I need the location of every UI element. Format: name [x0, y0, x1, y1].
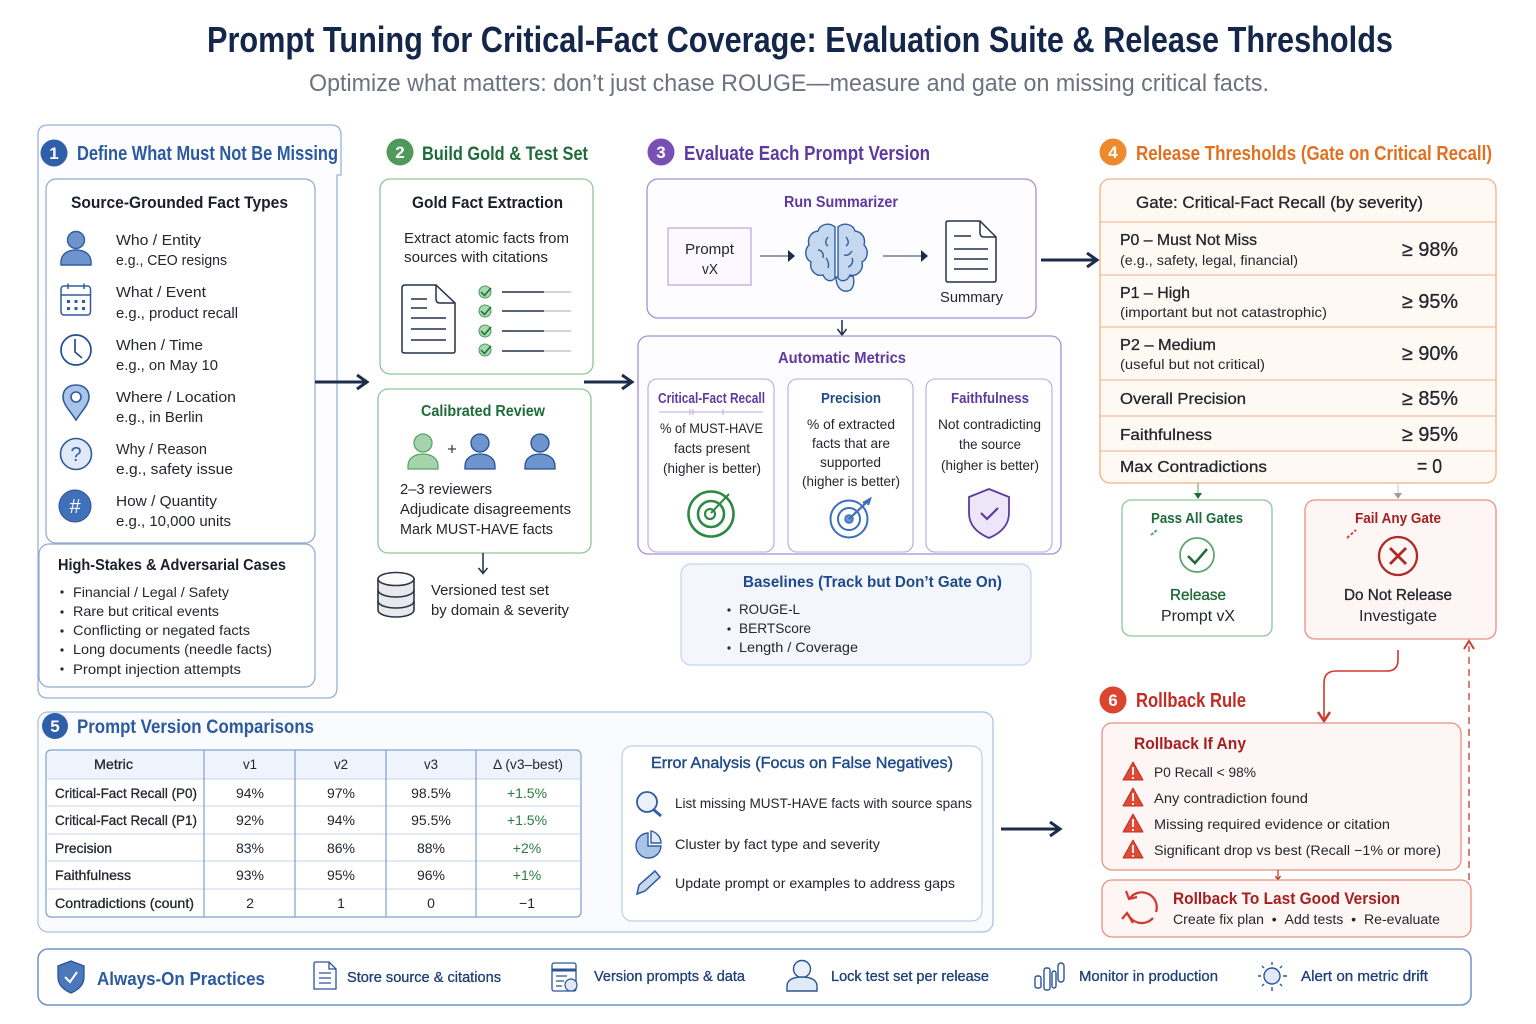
row: contradictions: 0 [427, 895, 435, 911]
heading: rollback rule: Rollback Rule [1136, 690, 1246, 712]
row: recall P0: 98.5% [411, 785, 451, 801]
card: calibrated review [378, 389, 591, 553]
panel: always-on practices bar [38, 949, 1471, 1005]
row: recall P0: 94% [236, 785, 264, 801]
card: rollback if any: Rollback If Any [1134, 735, 1247, 753]
panel 6: rollback rule [1100, 686, 1471, 937]
condition: contradiction: Any contradiction found [1154, 790, 1308, 806]
fact type: why: ? [70, 444, 82, 466]
item: cluster facts: Cluster by fact type and severity [675, 836, 880, 852]
card: fail any gate [1305, 500, 1496, 639]
condition: significant drop: Significant drop vs best (Recall −1% or more) [1154, 842, 1441, 858]
row: faithfulness: 95% [327, 867, 355, 883]
table header row: v3 [424, 756, 438, 772]
panel 5: prompt version comparisons [38, 712, 993, 932]
fact type: what [61, 284, 238, 322]
row: recall P1: 94% [327, 812, 355, 828]
metric card: precision: Precision [821, 391, 881, 407]
practice: store source: Store source & citations [347, 970, 501, 986]
gate row P2: ≥ 90% [1402, 343, 1458, 365]
bar heading: Always-On Practices [97, 968, 265, 989]
card: fail any gate: Fail Any Gate [1355, 511, 1441, 527]
table header row [94, 756, 563, 772]
row: contradictions [55, 895, 535, 911]
gate row faithfulness: ≥ 95% [1402, 424, 1458, 446]
arrow: fail to rollback [1318, 650, 1398, 721]
gate row P1: P1 – High [1120, 285, 1190, 302]
card: automatic metrics [638, 336, 1061, 554]
step badge 2 [386, 138, 414, 166]
item: cluster facts [636, 831, 880, 858]
item: update prompt: Update prompt or examples to address gaps [675, 875, 955, 891]
panel 1: define what must not be missing [38, 125, 341, 698]
metric card: precision [788, 379, 913, 552]
condition: P0 recall [1123, 762, 1256, 780]
prompt box: Prompt [685, 241, 735, 258]
card description: Mark MUST-HAVE facts [400, 521, 553, 538]
subtitle: Optimize what matters: don’t just chase ROUGE—measure and gate on missing critical facts. [309, 70, 1269, 97]
practice: version prompts [552, 963, 746, 991]
row: precision: 83% [236, 840, 264, 856]
step badge 6 [1100, 686, 1126, 714]
versioned test set label [431, 582, 569, 619]
metric card: critical-fact recall: % of MUST-HAVE [660, 420, 763, 436]
step badge 1: 1 [49, 144, 59, 163]
row: recall P1: +1.5% [507, 812, 547, 828]
icon: blue target [830, 499, 870, 538]
card: pass all gates: Pass All Gates [1151, 511, 1243, 527]
row: recall P0 [55, 785, 547, 801]
icon: cross [1379, 537, 1417, 575]
table header row: v1 [243, 756, 257, 772]
arrow: dashed return to fail box [1464, 641, 1474, 880]
gate row P0: (e.g., safety, legal, financial) [1120, 252, 1298, 268]
card: rollback to last good version: Create fix plan • Add tests • Re-evaluate [1173, 911, 1440, 927]
gate row faithfulness [1120, 424, 1458, 446]
row: recall P1: 92% [236, 812, 264, 828]
bullet list [60, 584, 272, 677]
baseline list: ROUGE-L [739, 601, 800, 617]
row: contradictions: −1 [519, 895, 535, 911]
heading: prompt version comparisons: Prompt Version Comparisons [77, 716, 314, 738]
fact type: when: When / Time [116, 337, 203, 354]
step badge 6: 6 [1108, 691, 1118, 710]
baseline list: BERTScore [739, 620, 811, 636]
fact type: why: Why / Reason [116, 441, 207, 458]
step badge 3 [648, 138, 674, 166]
panel 4: release thresholds [1100, 138, 1496, 639]
metric card: critical-fact recall: facts present [674, 440, 750, 456]
arrow: condition to rollback [1276, 870, 1280, 880]
row: faithfulness [55, 867, 541, 883]
card heading: Automatic Metrics [778, 350, 906, 367]
metric card: faithfulness: Faithfulness [951, 391, 1029, 407]
gate row P2 [1120, 337, 1458, 372]
arrow: step 3 to step 4 [1041, 253, 1097, 267]
card heading: Calibrated Review [421, 403, 545, 420]
gate row contradictions: Max Contradictions [1120, 459, 1267, 476]
step badge 2: 2 [395, 143, 405, 162]
card: pass all gates: Prompt vX [1161, 608, 1235, 625]
heading: build gold and test set: Build Gold & Test Set [422, 143, 588, 165]
practice: monitor: Monitor in production [1079, 969, 1218, 985]
step badge 5 [42, 713, 68, 739]
fact type: who: e.g., CEO resigns [116, 252, 227, 269]
table header row: Metric [94, 756, 133, 772]
item: update prompt [637, 871, 955, 894]
card description: Extract atomic facts from [404, 230, 569, 247]
metric card: precision: % of extracted [807, 416, 895, 432]
arrow: gate to fail [1394, 483, 1402, 499]
comparison table [46, 750, 581, 917]
card heading: Gold Fact Extraction [412, 193, 563, 212]
metric card: faithfulness [926, 379, 1052, 552]
card: error analysis [622, 746, 982, 921]
practice: store source [314, 962, 501, 989]
card: gold fact extraction [380, 179, 593, 374]
gate row P2: P2 – Medium [1120, 337, 1216, 354]
gate row P0: ≥ 98% [1402, 239, 1458, 261]
icon: document [402, 285, 455, 353]
fact type: why: e.g., safety issue [116, 461, 233, 478]
card: pass all gates [1122, 500, 1272, 636]
row: contradictions: 1 [337, 895, 345, 911]
card: baselines [681, 564, 1031, 665]
heading: define what must not be missing: Define What Must Not Be Missing [77, 143, 338, 165]
card: source-grounded fact types [46, 179, 315, 543]
card: rollback to last good version [1102, 880, 1471, 937]
gate row precision: Overall Precision [1120, 391, 1246, 408]
table header row: v2 [334, 756, 348, 772]
row: precision: +2% [513, 840, 541, 856]
arrow: prompt to brain [760, 250, 795, 262]
card description: Adjudicate disagreements [400, 501, 571, 518]
metric card: precision: facts that are [812, 435, 890, 451]
fact type: when [61, 335, 218, 374]
card description: 2–3 reviewers [400, 481, 492, 498]
baseline list [727, 601, 858, 655]
fact type: why [60, 438, 233, 478]
practice: version prompts: Version prompts & data [594, 969, 746, 985]
arrow: step 2 to step 3 [584, 375, 632, 389]
gate header: Gate: Critical-Fact Recall (by severity) [1136, 194, 1423, 212]
card heading: Baselines (Track but Don’t Gate On) [743, 574, 1002, 591]
row: precision: 88% [417, 840, 445, 856]
card heading: Run Summarizer [784, 194, 898, 211]
row: faithfulness: Faithfulness [55, 867, 131, 883]
metric card: critical-fact recall: Critical-Fact Recall [658, 391, 765, 407]
icon: shield [58, 961, 84, 993]
fact type: how: How / Quantity [116, 493, 218, 510]
row: recall P0: +1.5% [507, 785, 547, 801]
versioned test set label: by domain & severity [431, 602, 569, 619]
gate table [1100, 179, 1496, 483]
card: rollback to last good version: Rollback To Last Good Version [1173, 889, 1400, 908]
prompt box: vX [702, 261, 718, 278]
card: fail any gate: Investigate [1359, 608, 1437, 625]
step badge 1 [40, 140, 68, 166]
card: fail any gate: Do Not Release [1344, 587, 1452, 604]
icon: database [378, 572, 414, 617]
card description [400, 481, 571, 538]
step badge 4 [1100, 138, 1126, 166]
icon: purple shield [969, 489, 1009, 538]
card heading: High-Stakes & Adversarial Cases [58, 557, 286, 574]
card: pass all gates: Release [1170, 587, 1226, 604]
checklist icon [479, 286, 571, 356]
card: high-stakes and adversarial cases [39, 544, 315, 687]
gate row P0: P0 – Must Not Miss [1120, 232, 1257, 249]
row: precision: Precision [55, 840, 112, 856]
card: error analysis: Error Analysis (Focus on False Negatives) [651, 755, 953, 772]
card description [404, 230, 569, 266]
gate row precision [1120, 388, 1458, 410]
gate row P0 [1120, 232, 1458, 268]
metric card: faithfulness: the source [959, 436, 1021, 452]
row: recall P0: Critical-Fact Recall (P0) [55, 785, 197, 801]
table header row: Δ (v3–best) [493, 756, 563, 772]
arrow: brain to summary [883, 250, 928, 262]
icon: check [1180, 538, 1214, 572]
condition: missing evidence: Missing required evidence or citation [1154, 816, 1390, 832]
gate row contradictions: = 0 [1417, 456, 1442, 478]
gate row contradictions [1120, 456, 1442, 478]
icon: reviewers [408, 434, 555, 469]
fact type: how [59, 490, 231, 530]
fact type: who: Who / Entity [116, 232, 202, 249]
step badge 3: 3 [656, 143, 666, 162]
icon: green target [688, 492, 734, 536]
panel 2: build gold and test set [378, 138, 593, 619]
arrow: gate to pass [1194, 483, 1202, 499]
arrow: run to metrics [838, 320, 846, 335]
arrow: step 1 to step 2 [315, 375, 367, 389]
gate row faithfulness: Faithfulness [1120, 427, 1212, 444]
row: precision: 86% [327, 840, 355, 856]
card: run summarizer [647, 179, 1036, 318]
metric card: critical-fact recall: (higher is better) [663, 460, 761, 476]
practice: lock test set: Lock test set per release [831, 969, 989, 985]
fact type: what: What / Event [116, 284, 207, 301]
baseline list: Length / Coverage [739, 639, 858, 655]
row: faithfulness: 93% [236, 867, 264, 883]
item: list missing facts: List missing MUST-HAVE facts with source spans [675, 795, 972, 811]
practice: monitor [1035, 963, 1218, 990]
summary label: Summary [940, 289, 1003, 306]
gate row P1: ≥ 95% [1402, 291, 1458, 313]
bullet list: Long documents (needle facts) [73, 641, 272, 657]
metric card: precision: (higher is better) [802, 473, 900, 489]
bullet list: Rare but critical events [73, 603, 219, 619]
card description: sources with citations [404, 249, 548, 266]
bullet list: Financial / Legal / Safety [73, 584, 229, 600]
row: contradictions: Contradictions (count) [55, 895, 194, 911]
practice: alert: Alert on metric drift [1301, 969, 1428, 985]
fact type: how: # [69, 496, 81, 518]
fact type: how: e.g., 10,000 units [116, 513, 231, 530]
practice: lock test set [787, 960, 989, 991]
gate row P1: (important but not catastrophic) [1120, 304, 1327, 320]
fact type: what: e.g., product recall [116, 305, 238, 322]
panel 3: evaluate each prompt version [638, 138, 1061, 665]
condition: P0 recall: P0 Recall < 98% [1154, 764, 1256, 780]
row: recall P1: Critical-Fact Recall (P1) [55, 812, 197, 828]
bullet list: Prompt injection attempts [73, 661, 241, 677]
row: precision [55, 840, 541, 856]
row: recall P1 [55, 812, 547, 828]
metric card: precision: supported [820, 454, 881, 470]
metric card: faithfulness: (higher is better) [941, 457, 1039, 473]
fact type: where: e.g., in Berlin [116, 409, 203, 426]
fact type: who [61, 232, 227, 269]
step badge 5: 5 [50, 717, 60, 736]
arrow: comparisons to rollback [1001, 822, 1060, 836]
prompt box [668, 228, 751, 285]
gate row P1 [1120, 285, 1458, 320]
metric card: critical-fact recall [648, 379, 774, 552]
icon: summary document [946, 221, 996, 282]
versioned test set label: Versioned test set [431, 582, 550, 599]
row: faithfulness: 96% [417, 867, 445, 883]
row: recall P1: 95.5% [411, 812, 451, 828]
fact type: when: e.g., on May 10 [116, 357, 218, 374]
card: rollback if any [1102, 723, 1461, 870]
icon: rollback cycle [1122, 891, 1157, 923]
step badge 4: 4 [1108, 143, 1118, 162]
row: faithfulness: +1% [513, 867, 541, 883]
fact type: where: Where / Location [116, 389, 236, 406]
metric card: faithfulness: Not contradicting [938, 416, 1041, 432]
heading: evaluate each prompt version: Evaluate Each Prompt Version [684, 143, 930, 165]
gate row precision: ≥ 85% [1402, 388, 1458, 410]
row: recall P0: 97% [327, 785, 355, 801]
practice: alert [1258, 962, 1428, 991]
item: list missing facts [637, 792, 972, 816]
gate row P2: (useful but not critical) [1120, 356, 1265, 372]
card heading: Source-Grounded Fact Types [71, 193, 288, 212]
fact type: where [63, 385, 236, 426]
bullet list: Conflicting or negated facts [73, 622, 250, 638]
arrow: review to test set [478, 553, 488, 574]
row: contradictions: 2 [246, 895, 254, 911]
icon: brain [806, 224, 867, 291]
